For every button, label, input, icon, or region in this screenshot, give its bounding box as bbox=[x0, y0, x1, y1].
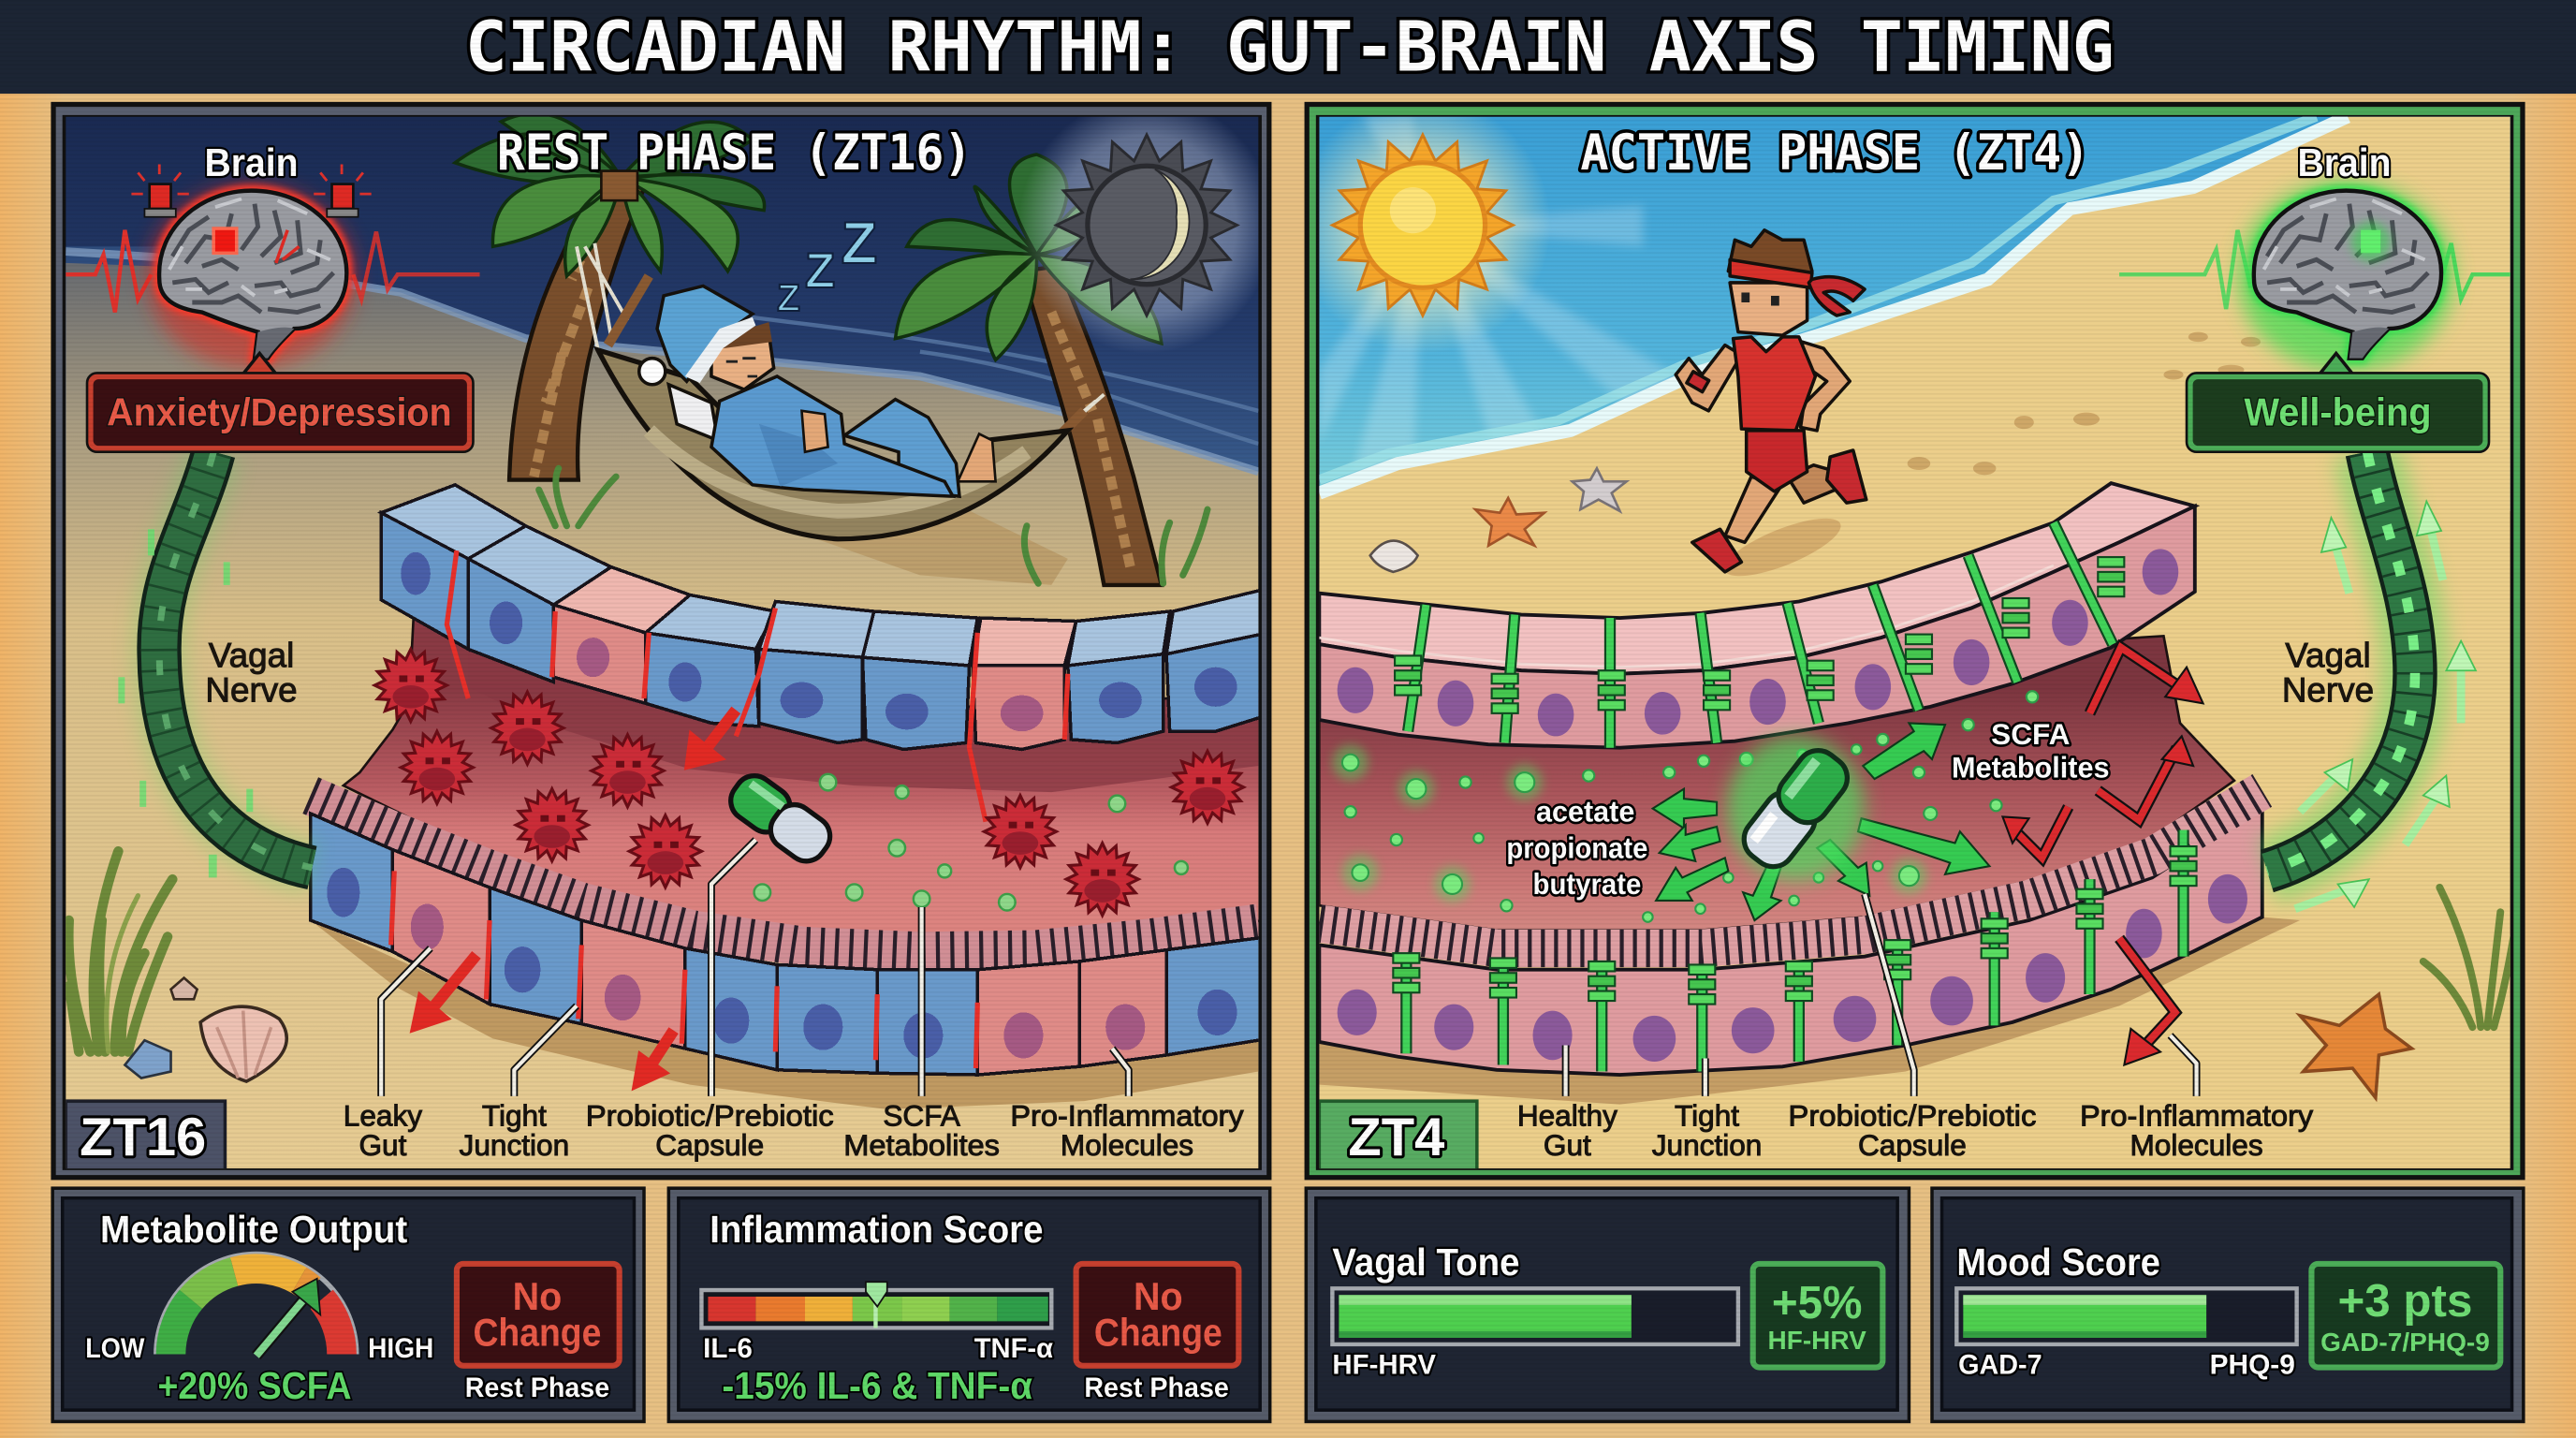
text: brain active: Brain bbox=[2298, 140, 2392, 184]
gauge bbox=[156, 1254, 357, 1356]
sand shadow right bbox=[1319, 917, 2300, 1105]
scfa dots rest bbox=[754, 774, 1188, 911]
icon: grass rest bbox=[68, 468, 1208, 1051]
labels rest bbox=[344, 1098, 1244, 1162]
bar labels: IL-6 bbox=[703, 1333, 753, 1364]
title: CIRCADIAN RHYTHM: GUT-BRAIN AXIS TIMING bbox=[465, 7, 2115, 87]
status: no change: No bbox=[513, 1274, 562, 1318]
labels active bbox=[1517, 1098, 2313, 1162]
icon: brain rest bbox=[146, 184, 357, 368]
bar labels bbox=[1958, 1350, 2295, 1381]
text: vagal nerve active: Vagal bbox=[2285, 637, 2371, 675]
labels rest: Leaky bbox=[344, 1098, 422, 1132]
value box: GAD-7/PHQ-9 bbox=[2320, 1328, 2490, 1357]
bar labels: GAD-7 bbox=[1958, 1350, 2042, 1381]
callout: well-being bbox=[2187, 353, 2489, 452]
bar labels: PHQ-9 bbox=[2210, 1350, 2295, 1381]
bar bbox=[1332, 1288, 1738, 1344]
labels rest: Junction bbox=[460, 1128, 569, 1162]
arrows: pro-inflammatory blocked bbox=[2011, 648, 2185, 1051]
labels rest: Probiotic/Prebiotic bbox=[586, 1098, 834, 1132]
leader lines active bbox=[1566, 894, 2197, 1096]
status: no change: Change bbox=[1094, 1311, 1222, 1355]
caption: Rest Phase bbox=[1084, 1372, 1229, 1403]
value box: HF-HRV bbox=[1767, 1326, 1866, 1355]
icon: grass right bbox=[2423, 888, 2513, 1027]
icon: sun bbox=[1295, 97, 1551, 353]
arrows: scfa release bbox=[1653, 723, 1989, 920]
labels active: Pro-Inflammatory bbox=[2080, 1098, 2313, 1132]
labels active: Tight bbox=[1675, 1098, 1739, 1132]
inflammation bar bbox=[701, 1282, 1051, 1328]
value box: +5% bbox=[1772, 1278, 1862, 1328]
sun rays bbox=[1320, 116, 1675, 474]
labels active: Probiotic/Prebiotic bbox=[1788, 1098, 2036, 1132]
icon: zzz: Z bbox=[842, 211, 877, 276]
text: metabolite names: butyrate bbox=[1533, 867, 1641, 901]
labels active: Junction bbox=[1652, 1128, 1762, 1162]
icon: zzz: Z bbox=[777, 276, 800, 319]
badge: zt16 bbox=[66, 1101, 225, 1170]
panel: inflammation score bbox=[667, 1186, 1271, 1423]
text: metabolite names: Metabolites bbox=[1952, 750, 2110, 784]
chart: gut lumen active bbox=[1319, 636, 2234, 931]
text: vagal nerve rest bbox=[208, 641, 296, 702]
text: vagal nerve rest: Vagal bbox=[209, 637, 294, 675]
heading: Vagal Tone bbox=[1332, 1240, 1519, 1284]
value box bbox=[1753, 1264, 1882, 1368]
lower epithelium rest bbox=[311, 796, 1268, 1075]
heading: Inflammation Score bbox=[710, 1208, 1043, 1251]
scfa dots active bbox=[1332, 691, 2038, 922]
heading: active phase: ACTIVE PHASE (ZT4) bbox=[1580, 125, 2089, 182]
arrows: vagal signal bbox=[2295, 526, 2461, 909]
gauge labels: HIGH bbox=[368, 1333, 433, 1364]
vagal nerve active bbox=[2267, 452, 2415, 871]
icon: seashell bbox=[124, 977, 286, 1081]
badge: zt4: ZT4 bbox=[1348, 1108, 1444, 1167]
text: metabolite names: acetate bbox=[1536, 795, 1634, 829]
bar label: HF-HRV bbox=[1332, 1350, 1436, 1381]
heading: Mood Score bbox=[1956, 1240, 2160, 1284]
caption: Rest Phase bbox=[465, 1372, 609, 1403]
gauge labels bbox=[85, 1333, 433, 1364]
badge: zt4 bbox=[1319, 1101, 1477, 1170]
icon: runner bbox=[1676, 230, 1866, 587]
leader lines rest bbox=[381, 840, 1129, 1096]
icon: zzz: Z bbox=[805, 243, 835, 299]
arrows: leak bbox=[411, 710, 736, 1090]
callout: well-being: Well-being bbox=[2244, 390, 2432, 434]
chart: gut lumen rest bbox=[344, 609, 1268, 945]
sand footprints bbox=[1908, 332, 2261, 475]
pulse line rest bbox=[66, 230, 479, 313]
icon: right palm tree bbox=[896, 154, 1162, 585]
lower epithelium active bbox=[1319, 790, 2262, 1075]
panel: mood score bbox=[1930, 1186, 2525, 1423]
text: metabolite names: propionate bbox=[1506, 830, 1647, 864]
upper epithelium rest bbox=[381, 485, 1268, 749]
icon: moon bbox=[1022, 116, 1258, 348]
icon: zzz bbox=[777, 221, 876, 312]
labels rest: Pro-Inflammatory bbox=[1010, 1098, 1244, 1132]
labels rest: Tight bbox=[482, 1098, 547, 1132]
icon: brain active bbox=[2237, 181, 2454, 372]
sparks rest bbox=[118, 529, 253, 877]
labels active: Gut bbox=[1544, 1128, 1591, 1162]
callout: anxiety bbox=[87, 353, 473, 452]
status: no change bbox=[457, 1264, 620, 1366]
bar bbox=[1956, 1288, 2297, 1344]
status: no change: Change bbox=[473, 1311, 601, 1355]
panel: rest phase bbox=[51, 97, 1275, 1180]
icon: left palm tree bbox=[455, 113, 765, 480]
text: metabolite names: SCFA bbox=[1991, 717, 2070, 751]
panel: active phase bbox=[1295, 97, 2525, 1180]
title bar bbox=[0, 0, 2576, 94]
leaky junction cracks bbox=[391, 550, 1068, 1068]
panel: vagal tone bbox=[1305, 1186, 1910, 1423]
molecules: pro-inflammatory viruses bbox=[374, 649, 1244, 916]
value: -15% IL-6 & TNF-α bbox=[722, 1364, 1032, 1407]
bar labels bbox=[703, 1333, 1054, 1364]
gauge labels: LOW bbox=[85, 1333, 145, 1364]
status: no change bbox=[1076, 1264, 1238, 1366]
labels rest: Metabolites bbox=[843, 1128, 1000, 1162]
badge: zt16: ZT16 bbox=[80, 1108, 206, 1167]
heading: Metabolite Output bbox=[100, 1208, 407, 1251]
labels rest: Capsule bbox=[655, 1128, 764, 1162]
pulse line active bbox=[2119, 230, 2512, 309]
labels active: Molecules bbox=[2130, 1128, 2263, 1162]
callout: anxiety: Anxiety/Depression bbox=[107, 390, 452, 434]
icon: sleeping person in hammock bbox=[577, 243, 1104, 539]
vagal nerve rest bbox=[159, 452, 312, 868]
labels rest: Molecules bbox=[1061, 1128, 1193, 1162]
text: vagal nerve active bbox=[2282, 637, 2374, 710]
labels active: Capsule bbox=[1858, 1128, 1967, 1162]
icon: capsule rest bbox=[728, 773, 833, 863]
panel: metabolite output bbox=[51, 1186, 646, 1423]
icon: capsule active bbox=[1727, 736, 1865, 881]
labels rest: SCFA bbox=[883, 1098, 960, 1132]
value: +20% SCFA bbox=[157, 1364, 352, 1407]
heading: rest phase: REST PHASE (ZT16) bbox=[497, 125, 972, 182]
icon: alarm lights bbox=[131, 165, 372, 217]
labels rest: Gut bbox=[359, 1128, 407, 1162]
bar labels: TNF-α bbox=[974, 1333, 1054, 1364]
labels active: Healthy bbox=[1517, 1098, 1617, 1132]
icon: starfish and shell bbox=[1370, 468, 2411, 1098]
status: no change: No bbox=[1134, 1274, 1183, 1318]
text: vagal nerve active: Nerve bbox=[2282, 671, 2374, 710]
value box: +3 pts bbox=[2338, 1276, 2472, 1327]
text: vagal nerve rest: Nerve bbox=[205, 671, 298, 710]
upper epithelium active bbox=[1319, 483, 2195, 748]
value box bbox=[2311, 1264, 2500, 1368]
text: metabolite names bbox=[1506, 717, 2110, 901]
text: brain rest: Brain bbox=[205, 140, 299, 184]
